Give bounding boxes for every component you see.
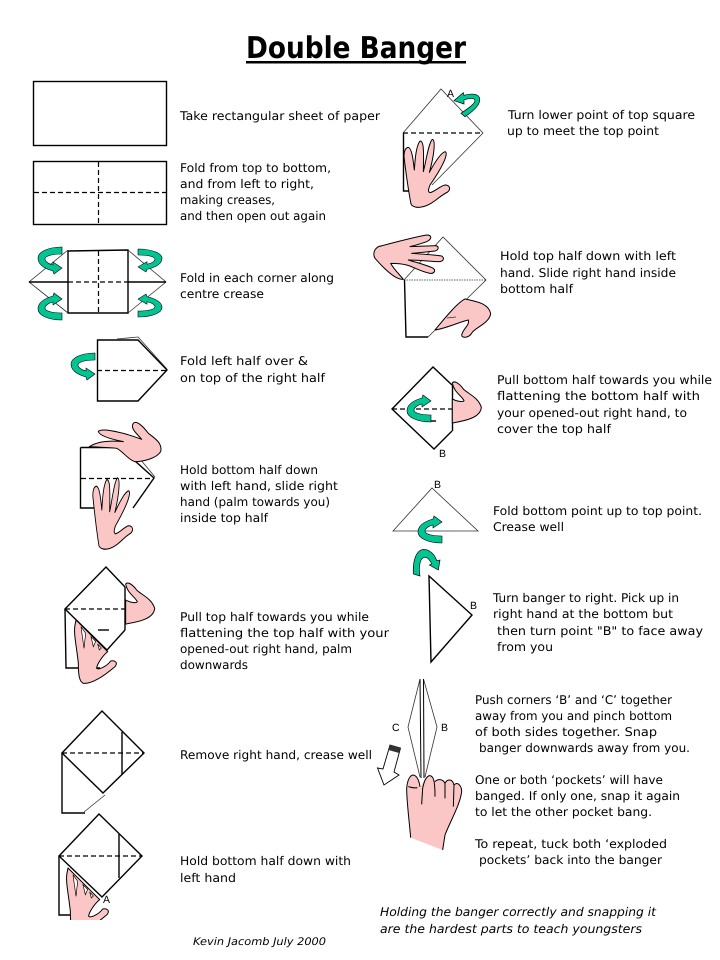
instruction text	[507, 108, 695, 138]
instruction text: making creases,	[180, 193, 275, 207]
instruction text: repeat	[474, 837, 667, 867]
instruction text	[180, 854, 351, 885]
instruction text: right hand at the bottom but	[493, 607, 673, 621]
instruction text	[180, 271, 334, 301]
instruction text: Fold from top to bottom,	[180, 161, 331, 175]
instruction text: and then open out again	[180, 209, 326, 223]
instruction text: Fold left half over &	[180, 354, 308, 368]
instruction text: your opened-out right hand, to	[497, 406, 687, 420]
step 14: pinch and snap	[378, 679, 690, 867]
label B: B	[470, 600, 477, 612]
icon: curved arrow	[454, 93, 480, 117]
instruction text	[493, 504, 702, 534]
instruction text: push corners	[475, 693, 690, 755]
instruction text	[500, 249, 676, 296]
icon: hand	[452, 382, 481, 423]
step 4: fold left half	[71, 337, 326, 401]
closing note: Holding the banger correctly and snapping it	[380, 905, 657, 919]
illustration: diamond with hands	[65, 567, 155, 683]
icon: curved arrow	[413, 549, 440, 576]
instruction text: downwards	[180, 658, 248, 672]
step 10: slide right hand	[374, 235, 676, 337]
instruction text: and from left to right,	[180, 177, 314, 191]
instruction text	[180, 463, 338, 525]
illustration: diamond with hand and arrow	[392, 367, 481, 460]
icon: hand	[404, 139, 450, 207]
closing note	[380, 905, 657, 936]
instruction text: hand. Slide right hand inside	[500, 266, 676, 280]
instruction text	[492, 591, 703, 654]
instruction text: Hold top half down with left	[500, 249, 676, 263]
instruction text: flattening the top half with your	[180, 626, 389, 640]
instruction text: push corners: banger downwards away from you.	[479, 741, 690, 755]
illustration: triangle with arrow	[393, 479, 478, 543]
illustration: creased sheet	[34, 162, 166, 224]
instruction text: inside top half	[180, 511, 269, 525]
closing note: are the hardest parts to teach youngsters	[380, 922, 642, 936]
icon: left hand	[66, 868, 109, 920]
step 7: remove right hand	[62, 711, 372, 813]
label A: A	[447, 88, 454, 100]
illustration: diamond with left hand	[59, 814, 142, 931]
icon: right hand	[435, 299, 491, 337]
icon: right hand	[126, 583, 155, 624]
step 8: hold bottom half	[59, 814, 351, 931]
title: Double Banger	[246, 31, 466, 66]
instruction text: Crease well	[493, 520, 564, 534]
illustration: paper with two hands	[374, 235, 491, 337]
author credit: Kevin Jacomb July 2000	[193, 936, 326, 948]
icon: left hand	[374, 235, 443, 279]
step 12: fold bottom point	[393, 479, 702, 543]
icon: lower hand	[75, 620, 116, 683]
illustration: both hands on paper	[80, 422, 161, 549]
label C: C	[392, 722, 400, 734]
instruction text: Pull bottom half towards you while	[497, 373, 712, 387]
instruction text: bottom half	[500, 282, 574, 296]
instruction text: Hold bottom half down	[180, 463, 318, 477]
instruction text	[180, 610, 389, 672]
instruction text: Turn lower point of top square	[507, 108, 695, 122]
instruction text: push corners: away from you and pinch bottom	[475, 709, 672, 723]
instruction text	[180, 161, 331, 223]
instruction text: Turn banger to right. Pick up in	[492, 591, 679, 605]
icon: right hand	[93, 478, 133, 549]
illustration: sheet of paper	[34, 82, 166, 146]
illustration: corners folded to centre	[29, 247, 166, 320]
label A: A	[103, 894, 110, 906]
icon: fist	[407, 775, 462, 850]
instruction text: Fold bottom point up to top point.	[493, 504, 702, 518]
instruction text: pockets	[475, 773, 680, 819]
instruction text: from you	[497, 640, 553, 654]
instruction text: Hold bottom half down with	[180, 854, 351, 868]
instruction text	[497, 373, 712, 436]
instruction text: cover the top half	[497, 422, 612, 436]
step 5: hold with hands	[80, 422, 338, 549]
icon: curved arrow	[407, 395, 431, 422]
step 2: creases	[34, 161, 331, 224]
step 3: fold corners	[29, 247, 334, 320]
illustration: triangle turned to right	[413, 549, 477, 662]
instruction text: centre crease	[180, 287, 264, 301]
step 9: turn lower point	[403, 88, 695, 207]
icon: left hand	[89, 422, 161, 462]
step 13: turn banger	[413, 549, 703, 662]
label B: B	[434, 479, 441, 491]
label B: B	[441, 722, 448, 734]
instruction text: with left hand, slide right	[180, 479, 338, 493]
step 11: pull bottom half	[392, 367, 712, 460]
instruction text	[180, 354, 326, 385]
instruction text: opened-out right hand, palm	[180, 642, 352, 656]
instruction text: push corners: of both sides together. Snap	[475, 725, 657, 739]
icon: curved arrows	[38, 247, 162, 320]
instruction text: repeat: pockets’ back into the banger	[479, 853, 662, 867]
icon: down arrow	[378, 745, 400, 785]
instruction text: up to meet the top point	[507, 124, 659, 138]
step 1: rectangular sheet	[34, 82, 380, 146]
instruction text: on top of the right half	[180, 371, 326, 385]
icon: curved arrow	[418, 516, 442, 543]
instruction text: pockets: banged. If only one, snap it again	[475, 789, 680, 803]
label B: B	[439, 448, 446, 460]
instruction text: flattening the bottom half with	[497, 389, 700, 403]
instruction text: Pull top half towards you while	[180, 610, 369, 624]
illustration: paper with hand and arrow	[403, 88, 483, 207]
instruction text: hand (palm towards you)	[180, 495, 330, 509]
instruction text: Take rectangular sheet of paper	[179, 109, 380, 123]
instruction text: push corners: Push corners ‘B’ and ‘C’ together	[475, 693, 672, 707]
illustration: diamond with flap	[62, 711, 144, 813]
instruction text: repeat: To repeat, tuck both ‘exploded	[474, 837, 667, 851]
illustration: pointed shape	[71, 337, 167, 401]
step 6: pull top half	[65, 567, 389, 683]
instruction text: pockets: to let the other pocket bang.	[475, 805, 652, 819]
instruction text: pockets: One or both ‘pockets’ will have	[475, 773, 663, 787]
instruction text: Remove right hand, crease well	[180, 748, 372, 762]
icon: curved arrow	[71, 353, 95, 380]
illustration: banger in fist	[378, 679, 462, 850]
instruction text: left hand	[180, 871, 236, 885]
instruction text: Fold in each corner along	[180, 271, 334, 285]
instruction text: then turn point "B" to face away	[497, 624, 703, 638]
